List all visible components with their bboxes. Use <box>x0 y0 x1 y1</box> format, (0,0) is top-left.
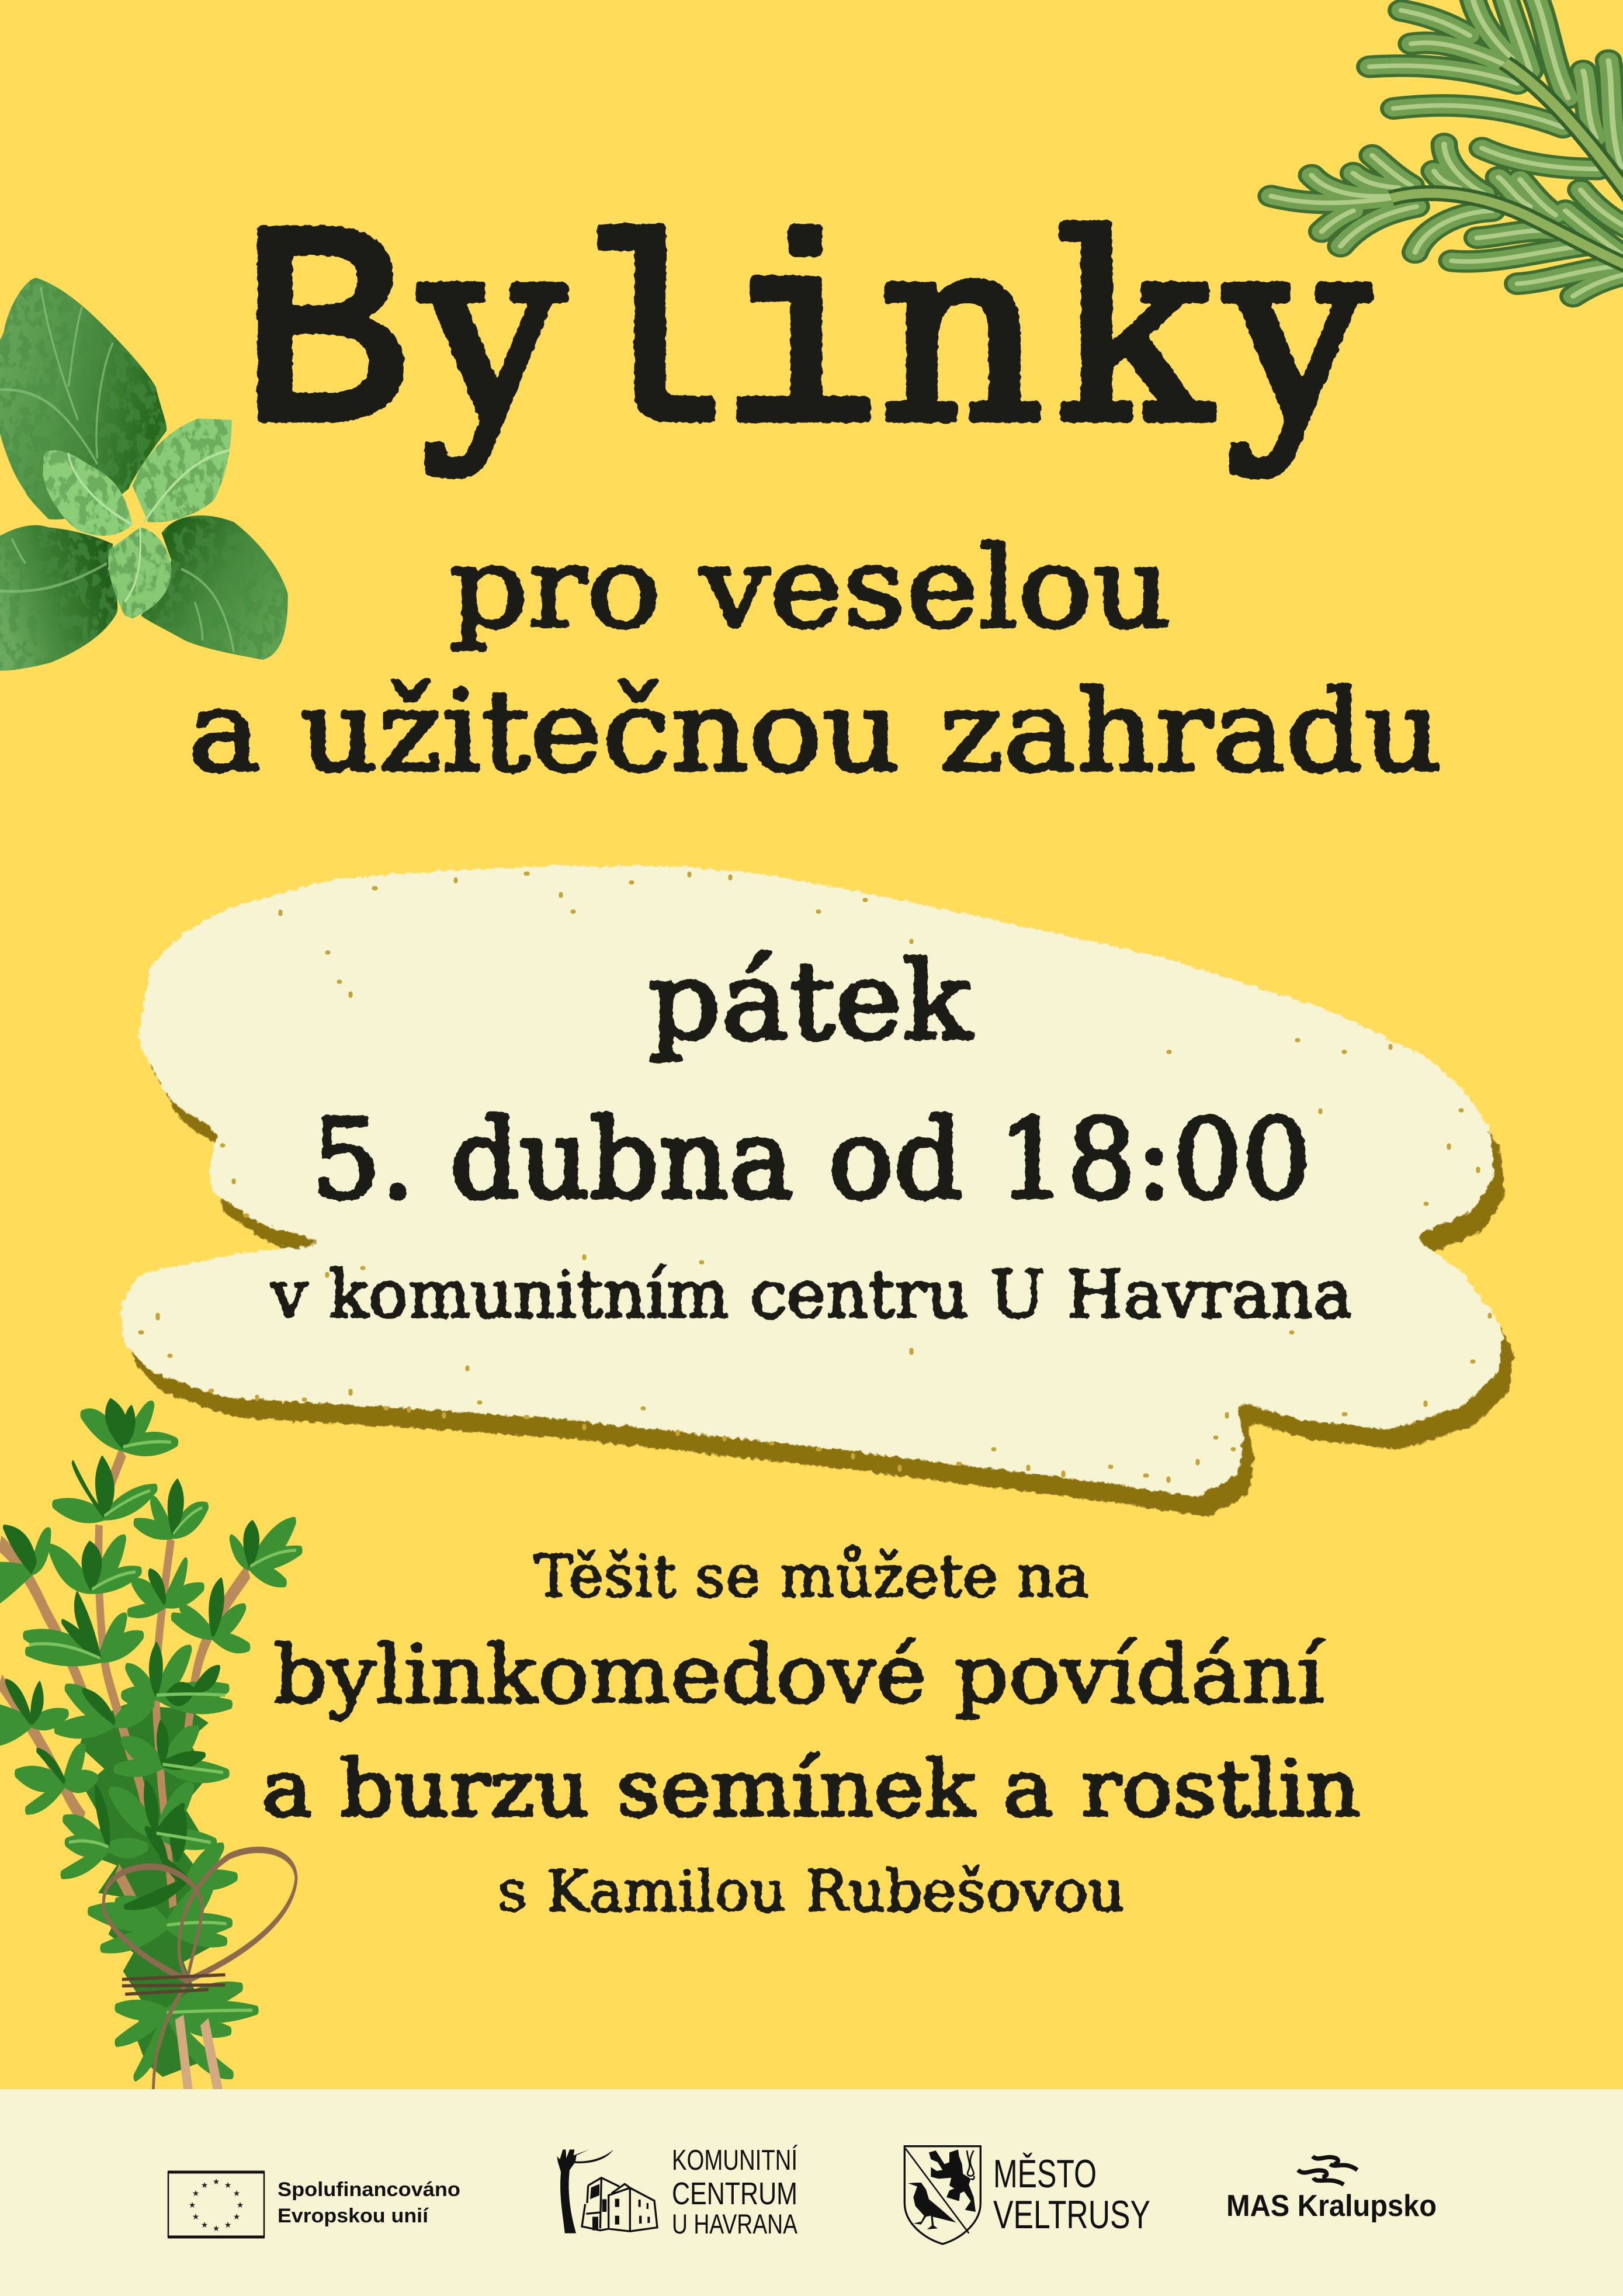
EU stars: ★ <box>237 2201 244 2210</box>
invitation text: a burzu semínek a rostlin <box>262 1743 1360 1834</box>
EU stars: ★ <box>213 2177 220 2187</box>
title: k <box>1056 182 1215 479</box>
raven <box>908 2183 956 2229</box>
raven tree <box>557 2149 613 2233</box>
invitation text <box>262 1542 1360 1924</box>
centre name: KOMUNITNÍ <box>672 2145 797 2176</box>
logo: MAS Kralupsko <box>1226 2156 1437 2223</box>
centre name: CENTRUM <box>672 2176 797 2211</box>
subtitle <box>188 523 1442 797</box>
lower stems <box>179 2017 219 2096</box>
event day, date and place: 5. dubna od 18:00 <box>311 1096 1311 1224</box>
EU stars: ★ <box>201 2221 208 2230</box>
EU stars: ★ <box>233 2212 240 2222</box>
invitation text: Těšit se můžete na <box>534 1542 1090 1611</box>
EU flag outline <box>168 2172 264 2237</box>
bouquet dense core <box>79 1705 217 2077</box>
EU stars: ★ <box>224 2221 231 2230</box>
title: i <box>722 200 880 498</box>
EU stars: ★ <box>189 2201 196 2210</box>
illustration: mint leaves <box>0 278 288 671</box>
MAS name: MAS Kralupsko <box>1226 2189 1437 2223</box>
heraldic lion <box>929 2149 976 2212</box>
event day, date and place <box>270 938 1353 1333</box>
title: B <box>239 181 411 505</box>
EU stars: ★ <box>192 2189 199 2198</box>
twine bow <box>103 1850 296 2091</box>
panel: event details brush blob <box>120 866 1514 1517</box>
logo: EU co-funded <box>168 2172 460 2237</box>
title: y <box>1222 182 1370 479</box>
EU caption: Spolufinancováno <box>278 2179 460 2201</box>
EU stars: ★ <box>233 2189 240 2198</box>
title: y <box>417 182 565 479</box>
EU stars: ★ <box>192 2212 199 2222</box>
invitation text: bylinkomedové povídání <box>273 1629 1325 1722</box>
thyme foliage: mid <box>0 1405 300 2077</box>
title <box>239 181 1370 505</box>
building <box>582 2178 657 2231</box>
thyme stems <box>0 1452 248 1907</box>
town name: VELTRUSY <box>993 2193 1150 2237</box>
title: n <box>879 182 1043 479</box>
blob speckles <box>140 874 1490 1481</box>
EU stars: ★ <box>224 2181 231 2190</box>
illustration: rosemary sprig <box>1271 0 1623 296</box>
footer band <box>0 2089 1623 2296</box>
illustration: thyme bouquet with twine <box>0 1401 300 2096</box>
EU stars: ★ <box>201 2181 208 2190</box>
invitation text: s Kamilou Rubešovou <box>498 1858 1125 1924</box>
wave icon <box>1298 2156 1357 2184</box>
thyme foliage: highlights <box>29 1442 296 2013</box>
event day, date and place: pátek <box>648 938 973 1064</box>
town name: MĚSTO <box>993 2152 1097 2196</box>
blob shadow <box>131 886 1514 1517</box>
event day, date and place: v komunitním centru U Havrana <box>270 1257 1353 1333</box>
blob face <box>120 866 1504 1497</box>
logo: Komunitní centrum U Havrana <box>557 2145 798 2239</box>
centre name: U HAVRANA <box>672 2208 798 2239</box>
EU caption: Evropskou unií <box>278 2205 429 2227</box>
thyme foliage: dark <box>4 1401 258 1907</box>
twine band and knot <box>122 1975 226 1994</box>
subtitle: pro veselou <box>449 523 1171 653</box>
coat of arms shield <box>904 2146 980 2244</box>
subtitle: a užitečnou zahradu <box>188 667 1442 797</box>
title: l <box>567 200 725 498</box>
EU stars: ★ <box>213 2224 220 2233</box>
logo: Město Veltrusy <box>904 2146 1150 2244</box>
